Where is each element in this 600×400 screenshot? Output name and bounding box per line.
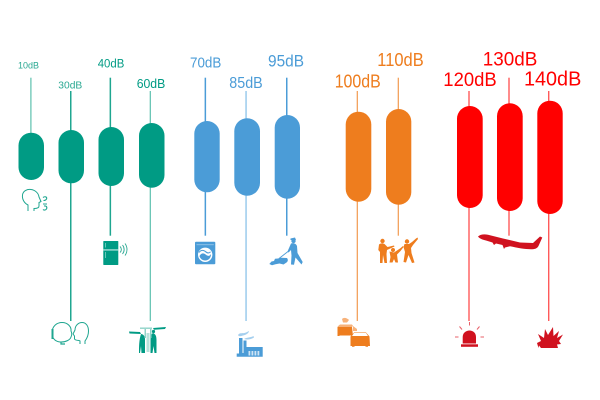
- connector: 130dB: [508, 78, 510, 236]
- bar: 100dB: [346, 112, 371, 202]
- label: 60dB: 60dB: [137, 77, 165, 91]
- panel: moderate sounds (blue): [190, 52, 304, 357]
- icon: airplane: [478, 234, 542, 249]
- label: 130dB: 130dB: [483, 49, 537, 71]
- bar: 130dB: [497, 103, 523, 211]
- label: 70dB: 70dB: [190, 56, 221, 72]
- bar: 120dB: [457, 106, 483, 208]
- connector: 95dB: [286, 78, 288, 236]
- bar: 85dB: [234, 118, 260, 196]
- icon: fridge with sound waves: [103, 241, 127, 265]
- icon: whispering head: [22, 189, 47, 211]
- bar: 10dB: [18, 133, 44, 180]
- connector: 60dB: [150, 91, 151, 321]
- label: 140dB: 140dB: [524, 68, 581, 90]
- panel: dangerous sounds (red): [443, 49, 581, 348]
- bar: 60dB: [139, 123, 164, 188]
- label: 120dB: 120dB: [443, 69, 497, 91]
- panel: quiet sounds (green): [18, 59, 166, 353]
- label: 85dB: 85dB: [229, 75, 263, 92]
- icon: band of musicians: [378, 238, 418, 263]
- label: 110dB: 110dB: [377, 50, 424, 70]
- label: 30dB: 30dB: [58, 79, 82, 91]
- connector: 120dB: [468, 91, 470, 321]
- connector: 85dB: [245, 91, 247, 321]
- panel: loud sounds (orange): [335, 50, 424, 347]
- bar: 95dB: [275, 115, 300, 199]
- bar: 70dB: [194, 121, 220, 192]
- icon: washing machine: [195, 242, 215, 264]
- icon: siren: [455, 322, 484, 347]
- icon: person mowing lawn: [269, 238, 303, 265]
- connector: 140dB: [548, 91, 549, 321]
- connector: 40dB: [110, 78, 111, 236]
- label: 100dB: 100dB: [335, 71, 381, 91]
- connector: 30dB: [70, 91, 72, 321]
- bar: 110dB: [386, 109, 411, 205]
- icon: explosion: [537, 327, 563, 348]
- label: 10dB: 10dB: [18, 60, 39, 70]
- label: 40dB: 40dB: [98, 59, 125, 71]
- connector: 100dB: [357, 91, 358, 321]
- connector: 70dB: [205, 78, 206, 236]
- icon: traffic of cars: [338, 318, 370, 347]
- icon: people with drills: [129, 327, 166, 353]
- icon: two heads talking: [52, 322, 88, 344]
- connector: 110dB: [398, 78, 399, 236]
- bar: 30dB: [58, 130, 84, 183]
- icon: factory: [237, 331, 263, 357]
- connector: 10dB: [30, 78, 32, 134]
- bar: 140dB: [537, 101, 563, 214]
- label: 95dB: 95dB: [268, 52, 304, 71]
- bar: 40dB: [98, 127, 124, 186]
